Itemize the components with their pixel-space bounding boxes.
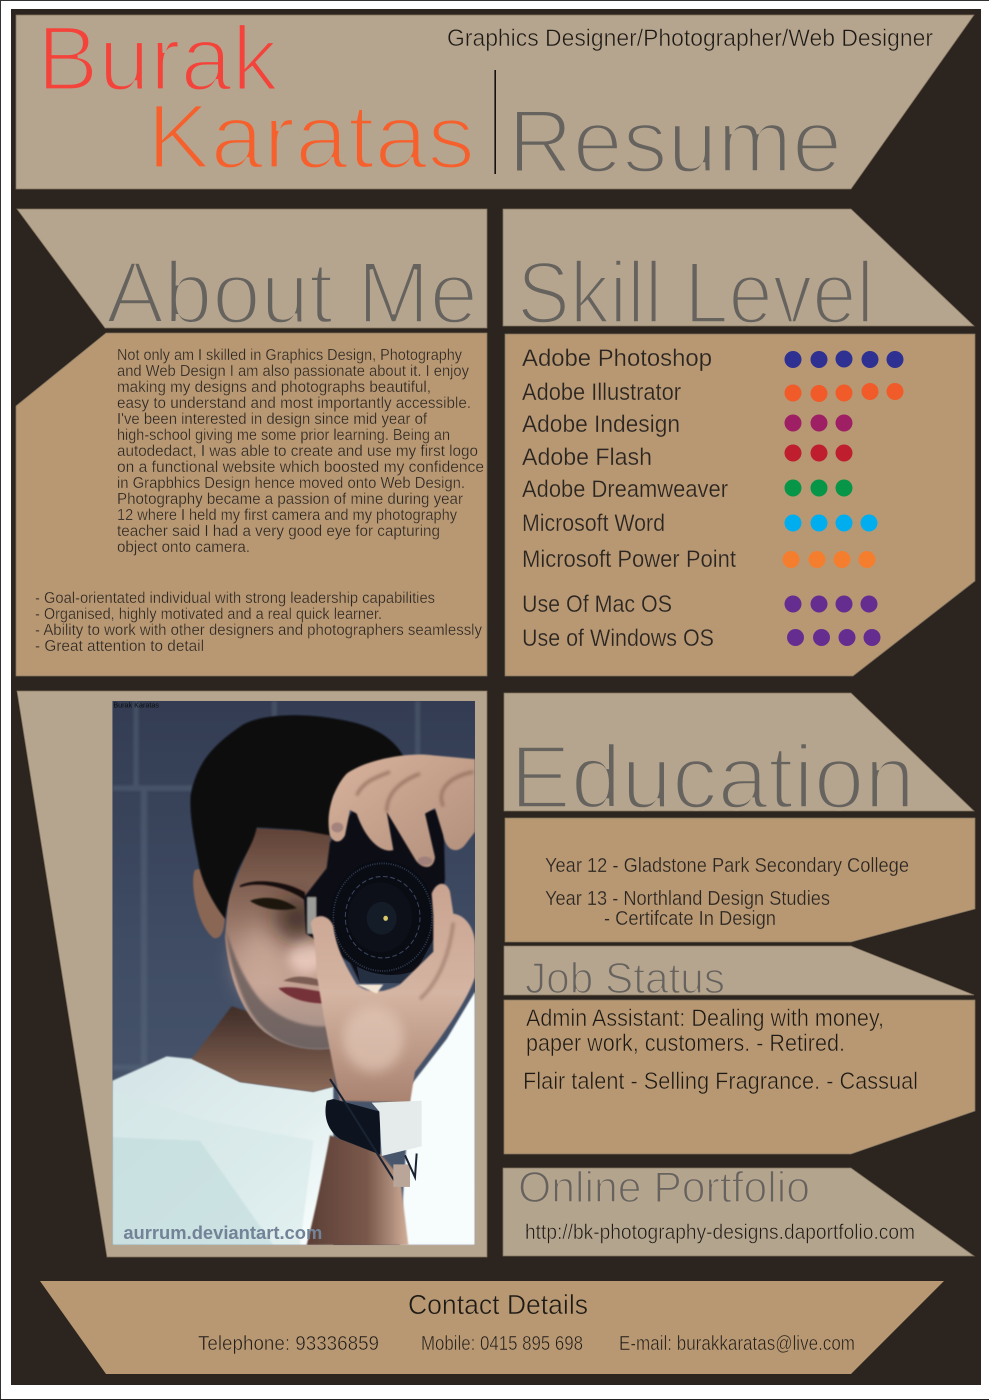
skill: Microsoft Power Point: Microsoft Power Point xyxy=(522,546,736,573)
skill: Use Of Mac OS xyxy=(522,591,878,618)
eye and brow xyxy=(240,882,305,899)
cheek light xyxy=(237,928,290,997)
skill: Adobe Photoshop: Adobe Photoshop xyxy=(522,345,712,372)
heading: Contact Details: Contact Details xyxy=(408,1289,588,1320)
about paragraph: on a functional website which boosted my confidence xyxy=(117,459,484,476)
about paragraph: Not only am I skilled in Graphics Design, Photography xyxy=(117,347,462,364)
camera body xyxy=(304,810,445,983)
skill: Adobe Illustrator: Adobe Illustrator xyxy=(522,379,681,406)
skill: Adobe Dreamweaver xyxy=(522,476,852,503)
about bullet list: - Great attention to detail xyxy=(35,638,204,655)
panel: contact details xyxy=(40,1281,944,1374)
about paragraph: making my designs and photographs beautiful, xyxy=(117,379,431,396)
skill: Adobe Dreamweaver: Adobe Dreamweaver xyxy=(522,476,728,503)
name: Burak: Burak xyxy=(37,8,279,110)
skill: Microsoft Word: Microsoft Word xyxy=(522,510,665,537)
ear xyxy=(193,868,225,938)
lips xyxy=(278,987,323,1003)
about paragraph: I've been interested in design since mid year of xyxy=(117,411,428,428)
portfolio url: http://bk-photography-designs.daportfolio.com xyxy=(525,1221,915,1244)
skill: Microsoft Power Point xyxy=(522,546,876,573)
heading: Education: Education xyxy=(510,728,915,828)
name: Karatas: Karatas xyxy=(147,86,475,188)
telephone: Telephone: 93336859 xyxy=(198,1333,379,1355)
panel: education details xyxy=(505,818,975,942)
mobile: Mobile: 0415 895 698 xyxy=(421,1333,583,1355)
about bullet list: - Organised, highly motivated and a real quick learner. xyxy=(35,606,382,623)
job entries: paper work, customers. - Retired. xyxy=(526,1030,845,1057)
panel: photo xyxy=(17,691,487,1257)
job entries: Admin Assistant: Dealing with money, xyxy=(526,1005,884,1032)
education entries: - Certifcate In Design xyxy=(604,908,776,930)
lower hand xyxy=(311,884,475,1103)
about paragraph: teacher said I had a very good eye for capturing xyxy=(117,523,440,540)
photographer credit: Burak Karatas xyxy=(113,702,160,710)
hair xyxy=(190,715,404,919)
mirror watermark: aurrum.deviantart.com xyxy=(123,1222,322,1243)
job title: Graphics Designer/Photographer/Web Designer xyxy=(447,25,933,52)
panel: online portfolio xyxy=(503,1163,974,1256)
skill: Adobe Photoshop xyxy=(522,345,904,372)
about bullet list: - Ability to work with other designers and photographers seamlessly xyxy=(35,622,482,639)
panel: skill ratings xyxy=(505,334,975,676)
about paragraph: 12 where I held my first camera and my photography xyxy=(117,507,457,524)
lens xyxy=(330,860,435,984)
eye socket shadow xyxy=(277,901,317,937)
skill: Use of Windows OS: Use of Windows OS xyxy=(522,625,714,652)
about paragraph: autodedact, I was able to create and use my first logo xyxy=(117,443,478,460)
about paragraph: object onto camera. xyxy=(117,539,250,556)
wristband and watch xyxy=(325,1079,422,1187)
about bullet list: - Goal-orientated individual with strong leadership capabilities xyxy=(35,590,435,607)
skill: Microsoft Word xyxy=(522,510,878,537)
panel: education heading xyxy=(504,693,974,828)
education entries: Year 13 - Northland Design Studies xyxy=(545,888,830,910)
skill: Use of Windows OS xyxy=(522,625,880,652)
skill: Adobe Flash xyxy=(522,444,852,471)
top hand fingers xyxy=(329,755,475,867)
skill: Adobe Flash: Adobe Flash xyxy=(522,444,652,471)
panel: skill level heading xyxy=(503,209,974,342)
heading: Online Portfolio: Online Portfolio xyxy=(518,1163,810,1212)
email: E-mail: burakkaratas@live.com xyxy=(619,1333,855,1355)
panel: job details xyxy=(504,1000,975,1154)
about paragraph: and Web Design I am also passionate about it. I enjoy xyxy=(117,363,469,380)
education entries: Year 12 - Gladstone Park Secondary College xyxy=(545,855,909,877)
education entries xyxy=(545,855,909,930)
heading: Resume: Resume xyxy=(508,92,842,192)
heading: About Me: About Me xyxy=(106,243,478,342)
skill: Adobe Indesign xyxy=(522,411,852,438)
about paragraph: Photography became a passion of mine during year xyxy=(117,491,463,508)
forearm xyxy=(307,1135,408,1245)
panel: about me heading xyxy=(17,209,487,342)
beard xyxy=(226,930,332,1049)
job entries: Flair talent - Selling Fragrance. - Cassual xyxy=(523,1068,918,1095)
about paragraph: easy to understand and most importantly accessible. xyxy=(117,395,471,412)
photo: man photographing himself in a mirror xyxy=(112,701,475,1245)
skill: Use Of Mac OS: Use Of Mac OS xyxy=(522,591,672,618)
vertical divider xyxy=(494,70,496,174)
heading: Job Status: Job Status xyxy=(525,954,725,1003)
skill: Adobe Indesign: Adobe Indesign xyxy=(522,411,680,438)
face xyxy=(225,828,333,1049)
heading: Skill Level: Skill Level xyxy=(517,243,874,342)
header panel xyxy=(16,8,974,192)
panel: about me text xyxy=(16,333,487,676)
about paragraph: high-school giving me some prior learning. Being an xyxy=(117,427,450,444)
job entries xyxy=(523,1005,918,1095)
about paragraph: in Grapbhics Design hence moved onto Web Design. xyxy=(117,475,465,492)
neck xyxy=(192,1006,335,1092)
skill: Adobe Illustrator xyxy=(522,379,904,406)
about bullet list xyxy=(35,590,482,655)
panel: job status heading xyxy=(504,946,974,1003)
shirt xyxy=(112,992,475,1245)
about paragraph xyxy=(117,347,484,556)
